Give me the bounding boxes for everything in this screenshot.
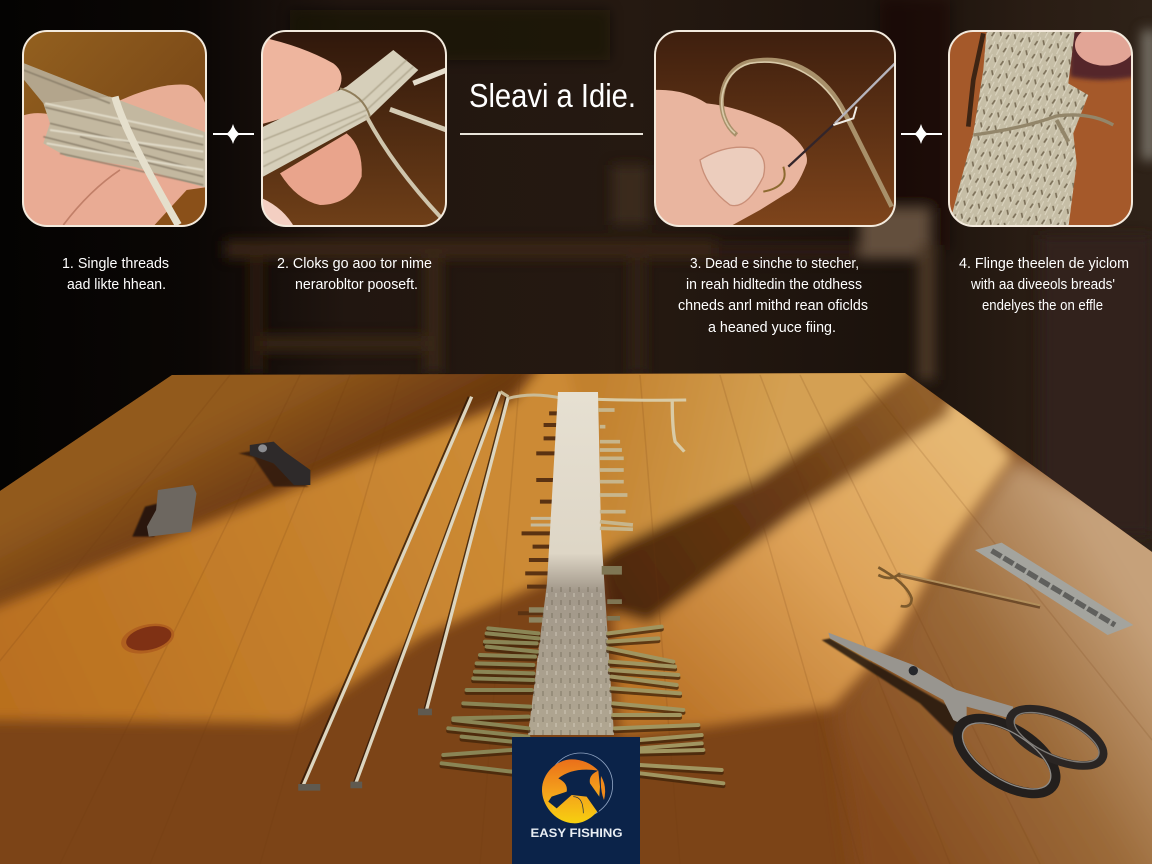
logo: Easy Fishing bbox=[512, 737, 640, 864]
logo wordmark: EASY FISHING bbox=[530, 826, 622, 840]
wood grain bbox=[0, 374, 1152, 740]
caption: step 3 bbox=[678, 255, 868, 336]
caption: step 2 bbox=[277, 255, 432, 293]
caption: step 3: a heaned yuce fiing. bbox=[708, 319, 836, 336]
right upper fringe and tie bbox=[598, 399, 686, 618]
panel frames bbox=[23, 31, 1132, 226]
caption: step 3: in reah hidltedin the otdhess bbox=[686, 276, 862, 293]
icon: needle and hook bbox=[878, 567, 1040, 607]
wood knot bbox=[117, 619, 178, 659]
title: Sleavi a Idie. bbox=[469, 77, 636, 114]
caption: step 4 bbox=[959, 255, 1129, 314]
lower fringe bbox=[442, 627, 723, 786]
left-side table objects bbox=[117, 392, 562, 787]
step 3 photo panel bbox=[653, 31, 895, 228]
caption: step 4: with aa diveeols breads' bbox=[970, 276, 1115, 293]
caption: step 1: 1. Single threads bbox=[62, 255, 169, 272]
connector: sparkle between steps 1 and 2 bbox=[213, 124, 254, 144]
connector: sparkle between steps 3 and 4 bbox=[901, 124, 942, 144]
caption: step 3: 3. Dead e sinche to stecher, bbox=[690, 255, 859, 272]
icon: metal clip bbox=[239, 442, 310, 487]
wooden table bbox=[0, 340, 1152, 864]
step 1 photo panel bbox=[20, 31, 210, 230]
caption: step 1 bbox=[62, 255, 169, 293]
long cords bbox=[298, 392, 562, 787]
caption: step 4: 4. Flinge theelen de yiclom bbox=[959, 255, 1129, 272]
title underline bbox=[460, 133, 643, 135]
caption: step 1: aad likte hhean. bbox=[67, 276, 166, 293]
caption: step 3: chneds anrl mithd rean oficlds bbox=[678, 297, 868, 314]
icon: scissors bbox=[822, 633, 1111, 808]
caption: step 2: 2. Cloks go aoo tor nime bbox=[277, 255, 432, 272]
logo emblem bbox=[542, 753, 613, 823]
caption: step 2: nerarobltor pooseft. bbox=[295, 276, 418, 293]
step 4 photo panel bbox=[948, 24, 1137, 228]
woven strip bbox=[528, 392, 614, 735]
caption: step 4: endelyes the on effle bbox=[982, 297, 1103, 314]
icon: ruler bbox=[975, 543, 1133, 635]
left upper fringe bbox=[518, 413, 560, 620]
step 2 photo panel bbox=[258, 31, 447, 228]
icon: whetstone bbox=[132, 485, 197, 537]
right-side tools bbox=[822, 543, 1133, 808]
